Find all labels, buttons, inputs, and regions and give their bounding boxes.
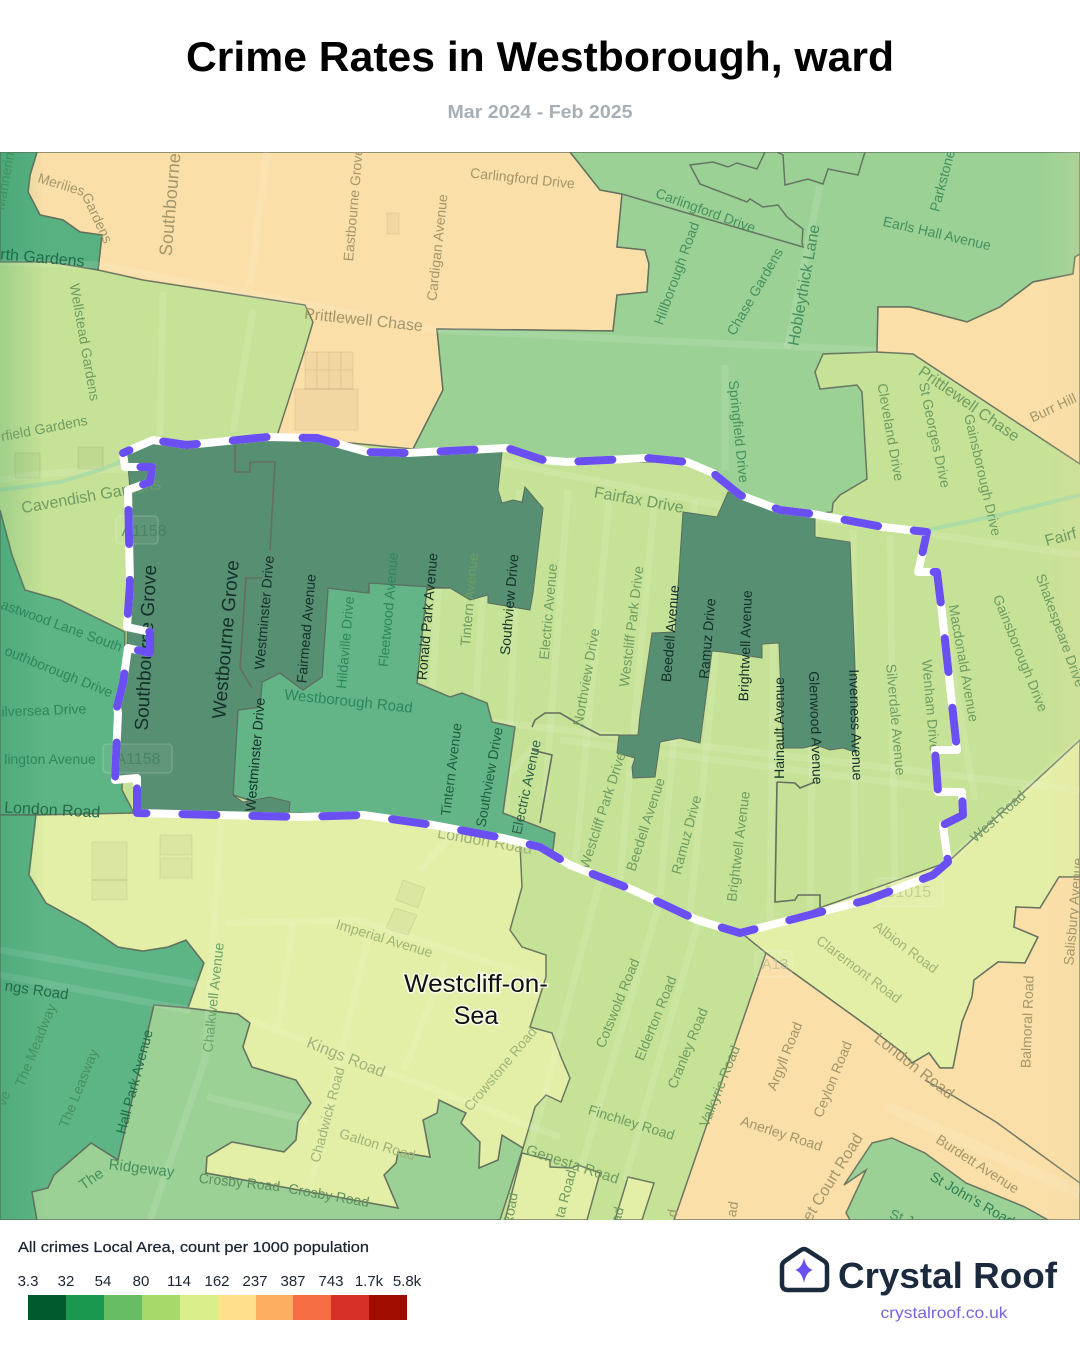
road labels: mid green areas: Parkstone	[926, 148, 958, 213]
road labels: west green area	[0, 551, 544, 1003]
road labels: mid green areas: The	[76, 1165, 107, 1194]
icon: Crystal Roof house logo	[782, 1249, 827, 1290]
road labels: light green ward area: Macdonald Avenue	[946, 603, 982, 723]
road labels: mid green areas: Ridgeway	[108, 1156, 176, 1181]
road labels: light green ward area: Elderton Road	[631, 974, 680, 1063]
road labels: pale yellow area: Chadwick Road	[307, 1065, 348, 1164]
road labels: light green ward area: Westcliff Park Drive	[616, 565, 646, 688]
road labels: northern orange area: Eastbourne Grove	[340, 147, 366, 262]
road labels: light green ward area: Cotswold Road	[592, 956, 643, 1050]
legend scale values: 80	[133, 1273, 149, 1290]
legend scale values: 32	[58, 1273, 74, 1290]
road labels: mid green areas	[0, 143, 1017, 1229]
legend scale values: 3.3	[18, 1273, 38, 1290]
streams	[0, 458, 1080, 530]
road labels: northern orange area: Anerley Road	[739, 1113, 824, 1154]
road labels: northern orange area: Southbourne	[156, 152, 184, 257]
road labels: west green area: astwood Lane South	[0, 596, 124, 655]
road labels: light green ward area: Wenham Drive	[919, 659, 943, 752]
road labels: dark ward area: Southview Drive	[497, 553, 521, 656]
right shading	[1051, 152, 1080, 1220]
road labels: pale yellow area: London Road	[436, 825, 534, 858]
road labels: mid green areas: Chase Gardens	[723, 245, 786, 338]
crime area: northern orange zone	[28, 152, 649, 449]
road labels: west green area: Westborough Road	[283, 686, 413, 717]
legend scale values: 237	[242, 1273, 268, 1290]
road labels: pale yellow area: Claremont Road	[813, 932, 905, 1006]
road labels: pale yellow area: Crowstone Road	[461, 1024, 540, 1114]
road labels: northern orange area: Carlingford Drive	[469, 165, 576, 191]
brand url: crystalroof.co.uk	[880, 1305, 1009, 1322]
ward area: dark eastern block	[617, 492, 855, 778]
road labels: mid green areas: St J	[888, 1206, 916, 1229]
road labels: west green area: Fleetwood Avenue	[375, 551, 401, 668]
road labels: light green ward area: Wellstead Gardens	[67, 282, 103, 402]
road labels: light green ward area: Gainsborough Drive	[961, 412, 1005, 538]
road labels: dark ward area: Westminster Drive	[251, 555, 277, 670]
crime area: Westcliff pale yellow-green	[29, 813, 570, 1208]
road labels: northern orange area: Ceylon Road	[810, 1039, 855, 1120]
road labels: northern orange area: Gardens	[79, 190, 116, 246]
road labels: light green ward area: Finchley Road	[586, 1101, 677, 1143]
road labels: light green ward area: Tintern Avenue	[457, 552, 481, 647]
road labels: northern orange area: Balmoral Road	[1017, 975, 1037, 1068]
title: Crime Rates in Westborough, ward	[186, 33, 894, 80]
road labels: northern orange area: Argyll Road	[763, 1020, 805, 1093]
road labels: light green ward area: Valkyrie Road	[696, 1043, 743, 1129]
road labels: light green ward area: Road	[499, 1191, 521, 1227]
road labels: light green ward area: Fairfax Drive	[593, 484, 685, 517]
road labels: shields	[115, 523, 931, 973]
crime area: north-west corner green	[0, 152, 102, 270]
crime area: east orange zone	[877, 254, 1080, 464]
crime area: Genesta pale blocks	[505, 1153, 654, 1220]
road labels: light green ward area: ad	[607, 1205, 627, 1224]
road labels: light green ward area: Prittlewell Chase	[915, 363, 1022, 446]
road labels: northern orange area: et Court Road	[800, 1131, 867, 1224]
road labels: pale yellow area	[198, 825, 941, 1210]
road labels: mid green areas: The Meadway	[11, 1001, 59, 1089]
legend scale values	[18, 1273, 422, 1290]
legend scale values: 743	[318, 1273, 344, 1290]
road labels: mid green areas: Earls Hall Avenue	[882, 213, 993, 253]
legend scale values: 387	[280, 1273, 306, 1290]
road labels: light green ward area: Beedell Avenue	[623, 776, 668, 873]
road labels: dark ward area: Ronald Park Avenue	[413, 552, 441, 681]
legend scale values: 54	[95, 1273, 111, 1290]
ward area: dark western block	[117, 437, 543, 813]
road labels: northern orange area: Burr Hill	[1027, 390, 1079, 425]
road labels: light green ward area: Genesta Road	[524, 1142, 621, 1188]
road labels: light green ward area: Westcliff Park Drive	[576, 750, 629, 871]
road labels: dark ward area: Inverness Avenue	[846, 669, 866, 781]
road labels: west green area: Hildaville Drive	[333, 596, 357, 689]
legend scale values: 114	[167, 1273, 191, 1290]
road labels: mid green areas: The Leasway	[55, 1047, 101, 1130]
road labels: light green ward area: St Georges Drive	[916, 381, 954, 489]
road labels: light green ward area: Brightwell Avenue	[723, 790, 753, 902]
road labels: light green ward area: Electric Avenue	[536, 563, 560, 660]
road labels: northern orange area: d	[664, 1208, 681, 1218]
road labels: dark ward area: Westminster Drive	[242, 697, 268, 812]
road labels: light green ward area: Ramuz Drive	[668, 793, 704, 876]
road labels: light green ward area: Northview Drive	[570, 627, 603, 727]
road labels: pale yellow area: Galton Road	[338, 1125, 417, 1163]
road shields	[103, 516, 943, 977]
road labels: west green area: London Road	[4, 800, 101, 822]
road labels: west green area: lington Avenue	[4, 751, 96, 767]
road labels: light green ward area: Silverdale Avenue	[883, 663, 909, 776]
road labels: mid green areas: Springfield Drive	[726, 380, 752, 484]
road labels: northern orange area: Cardigan Avenue	[423, 193, 451, 302]
legend scale values: 5.8k	[393, 1273, 422, 1290]
road labels: dark ward area: Hainault Avenue	[771, 677, 787, 779]
road labels: light green ward area: Cavendish Gardens	[20, 476, 162, 517]
legend title: All crimes Local Area, count per 1000 population	[18, 1239, 369, 1256]
road labels: shields: A1158	[121, 523, 167, 540]
legend scale values: 1.7k	[355, 1273, 384, 1290]
legend scale values: 162	[204, 1273, 230, 1290]
crime area: north-east green zone	[413, 152, 1080, 514]
road labels: mid green areas: rth Gardens	[0, 246, 85, 271]
legend colour swatches	[28, 1295, 407, 1320]
road labels: light green ward area: rfield Gardens	[0, 412, 89, 444]
road labels: west green area: outhborough Drive	[2, 642, 115, 700]
road labels: dark ward area: Westbourne Grove	[209, 559, 244, 720]
road labels: pale yellow area: Crosby Road	[287, 1180, 370, 1210]
internal boundary lines: north and south	[622, 152, 1080, 1183]
crime area: west darker green	[0, 510, 135, 815]
road labels: west green area: Electric Avenue	[508, 738, 544, 836]
road labels: light green ward area: Gainsborough Drive	[990, 592, 1051, 714]
ward area: mid-green southern block	[233, 583, 555, 850]
road labels: dark ward area: Brightwell Avenue	[735, 590, 755, 702]
road labels: west green area: ilversea Drive	[1, 701, 87, 719]
road labels: shields: A13	[762, 956, 788, 973]
road labels: west green area: ngs Road	[4, 978, 70, 1003]
streets	[0, 152, 1080, 1220]
road labels: light green ward area: West Road	[967, 787, 1029, 845]
road labels: northern orange area: Merilies	[36, 170, 87, 199]
road labels: northern orange area: Burdett Avenue	[933, 1131, 1022, 1197]
road labels: dark ward area: Ramuz Drive	[696, 597, 719, 680]
ward boundary	[115, 437, 963, 933]
road labels: mid green areas: Hall Park Avenue	[113, 1028, 156, 1136]
brand name: Crystal Roof	[838, 1255, 1058, 1296]
road labels: mid green areas: Carlingford Drive	[654, 185, 758, 236]
road labels: northern orange area: ad	[723, 1200, 741, 1218]
crime area: south-west green	[0, 815, 204, 1220]
crime area: St John's green	[844, 1138, 1048, 1220]
internal area boundary lines	[235, 440, 820, 910]
park and building blocks	[15, 213, 425, 935]
road labels: pale yellow area: Albion Road	[871, 918, 941, 976]
road labels: dark ward area	[132, 552, 866, 812]
place label: Westcliff-on-Sea: Sea	[454, 1002, 498, 1030]
road labels: dark ward area: Southbourne Grove	[132, 564, 161, 731]
road labels: light green ward area: Fairf	[1043, 525, 1079, 550]
road labels: mid green areas: Hobleythick Lane	[786, 223, 824, 347]
road labels: light green ward area: ta Road	[551, 1168, 579, 1219]
crime area: Ridgeway and Galton mid green	[32, 1005, 523, 1220]
road labels: dark ward area: Fairmead Avenue	[293, 573, 319, 684]
road labels: dark ward area: Glenwood Avenue	[806, 671, 826, 785]
road labels: pale yellow area: Crosby Road	[198, 1170, 281, 1194]
road labels: mid green areas: Hillborough Road	[650, 220, 702, 327]
road labels: pale yellow area: Kings Road	[304, 1034, 387, 1081]
place label: Westcliff-on-Sea: Westcliff-on-	[404, 970, 548, 998]
road labels: light green ward area	[0, 282, 1080, 1227]
road labels: dark ward area: Beedell Avenue	[658, 584, 682, 683]
road labels: northern orange area: Prittlewell Chase	[303, 306, 424, 335]
road labels: west green area: Southview Drive	[472, 726, 506, 828]
place label: Westcliff-on-Sea	[402, 972, 548, 1026]
road labels: northern orange area: London Road	[871, 1030, 957, 1103]
road labels: light green ward area: Cleveland Drive	[874, 382, 907, 482]
road labels: pale yellow area: Imperial Avenue	[334, 916, 435, 961]
crime area: south-east orange	[674, 877, 1080, 1220]
road labels: pale yellow area: Chalkwell Avenue	[199, 942, 227, 1053]
legend	[18, 1239, 422, 1320]
road labels: mid green areas: St John's Road	[928, 1168, 1017, 1229]
road labels: shields: A1158	[115, 751, 161, 768]
crime area: south-east pale yellow-green	[744, 740, 1080, 1068]
road labels: shields: B1015	[885, 884, 931, 901]
road labels: northern orange area	[36, 147, 1080, 1224]
road labels: west green area: Tintern Avenue	[437, 722, 465, 817]
subtitle: date range: Mar 2024 - Feb 2025	[448, 102, 632, 122]
side shading	[0, 152, 38, 1220]
road labels: light green ward area: Cranley Road	[664, 1005, 711, 1091]
